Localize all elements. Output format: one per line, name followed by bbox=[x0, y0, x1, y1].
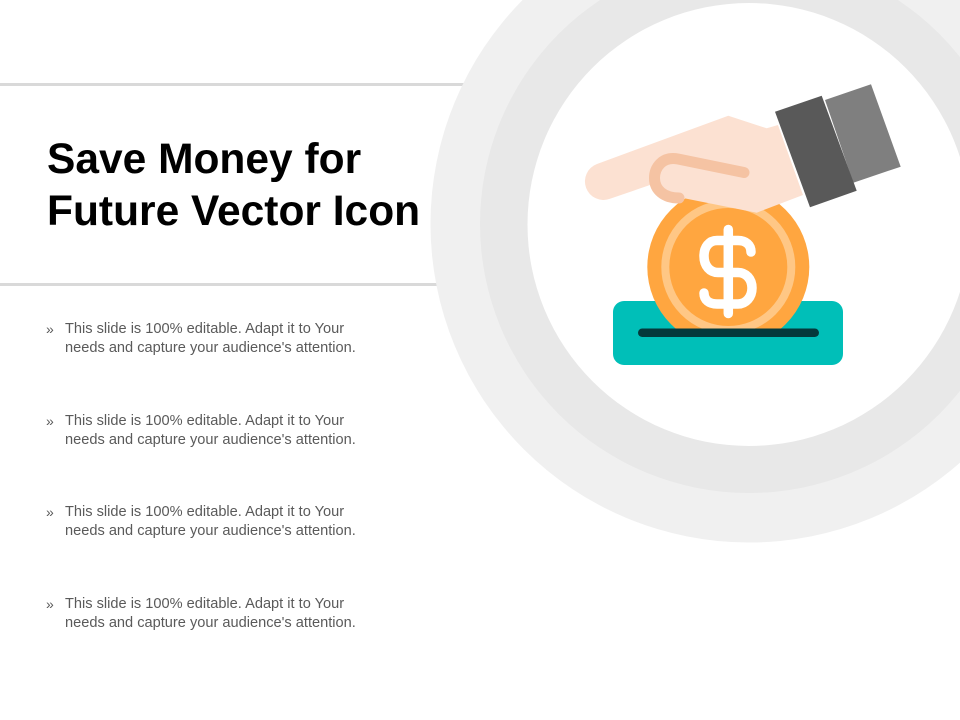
text block 3: needs and capture your audience's attention. bbox=[65, 522, 356, 538]
text block 1 bbox=[46, 321, 356, 356]
icon: coin slot bbox=[638, 328, 819, 337]
text block 3: » bbox=[46, 504, 54, 520]
title: Future Vector Icon bbox=[47, 188, 420, 235]
text block 4 bbox=[46, 596, 356, 630]
text block 1: This slide is 100% editable. Adapt it to Your bbox=[65, 321, 344, 337]
text block 4: needs and capture your audience's attention. bbox=[65, 614, 356, 630]
graphic: concentric circles with hand and coin icon bbox=[430, 0, 960, 542]
icon: sleeve bbox=[825, 84, 901, 183]
title bbox=[47, 136, 420, 235]
text block 2 bbox=[46, 413, 356, 448]
text block 4: This slide is 100% editable. Adapt it to Your bbox=[65, 596, 344, 612]
text block 3: This slide is 100% editable. Adapt it to Your bbox=[65, 504, 344, 520]
text block 3 bbox=[46, 504, 356, 538]
text block 4: » bbox=[46, 596, 54, 612]
icon: dollar sign bbox=[704, 230, 752, 314]
middle ring bbox=[480, 0, 960, 493]
text block 1: » bbox=[46, 321, 54, 337]
icon: piggy bank slot box bbox=[613, 301, 843, 365]
title: Save Money for bbox=[47, 136, 361, 183]
icon: cuff bbox=[775, 96, 857, 207]
icon: thumb bbox=[654, 159, 744, 198]
text block 2: needs and capture your audience's attention. bbox=[65, 432, 356, 448]
icon: hand bbox=[585, 116, 803, 213]
outer ring bbox=[430, 0, 960, 542]
text block 2: » bbox=[46, 413, 54, 429]
icon: coin bbox=[647, 198, 810, 328]
text block 1: needs and capture your audience's attention. bbox=[65, 340, 356, 356]
text block 2: This slide is 100% editable. Adapt it to Your bbox=[65, 413, 344, 429]
inner white circle bbox=[528, 3, 960, 446]
